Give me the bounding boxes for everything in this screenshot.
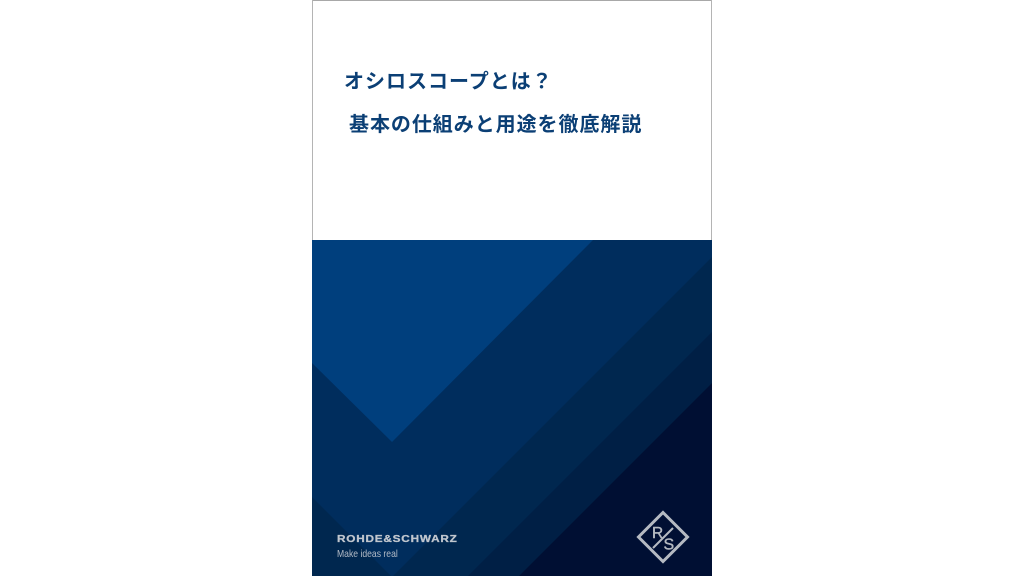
tagline: Make ideas real — [337, 548, 398, 560]
icon: R&S diamond logo: R — [652, 525, 663, 542]
panel: book cover — [312, 0, 712, 576]
icon: R&S diamond logo — [636, 510, 690, 564]
brand wordmark: ROHDE&SCHWARZ — [337, 533, 458, 545]
geometric chevron background — [312, 240, 712, 576]
title line 1: オシロスコープとは？ — [344, 71, 553, 93]
icon: R&S diamond logo: S — [663, 536, 674, 554]
title line 2: 基本の仕組みと用途を徹底解説 — [349, 114, 642, 136]
